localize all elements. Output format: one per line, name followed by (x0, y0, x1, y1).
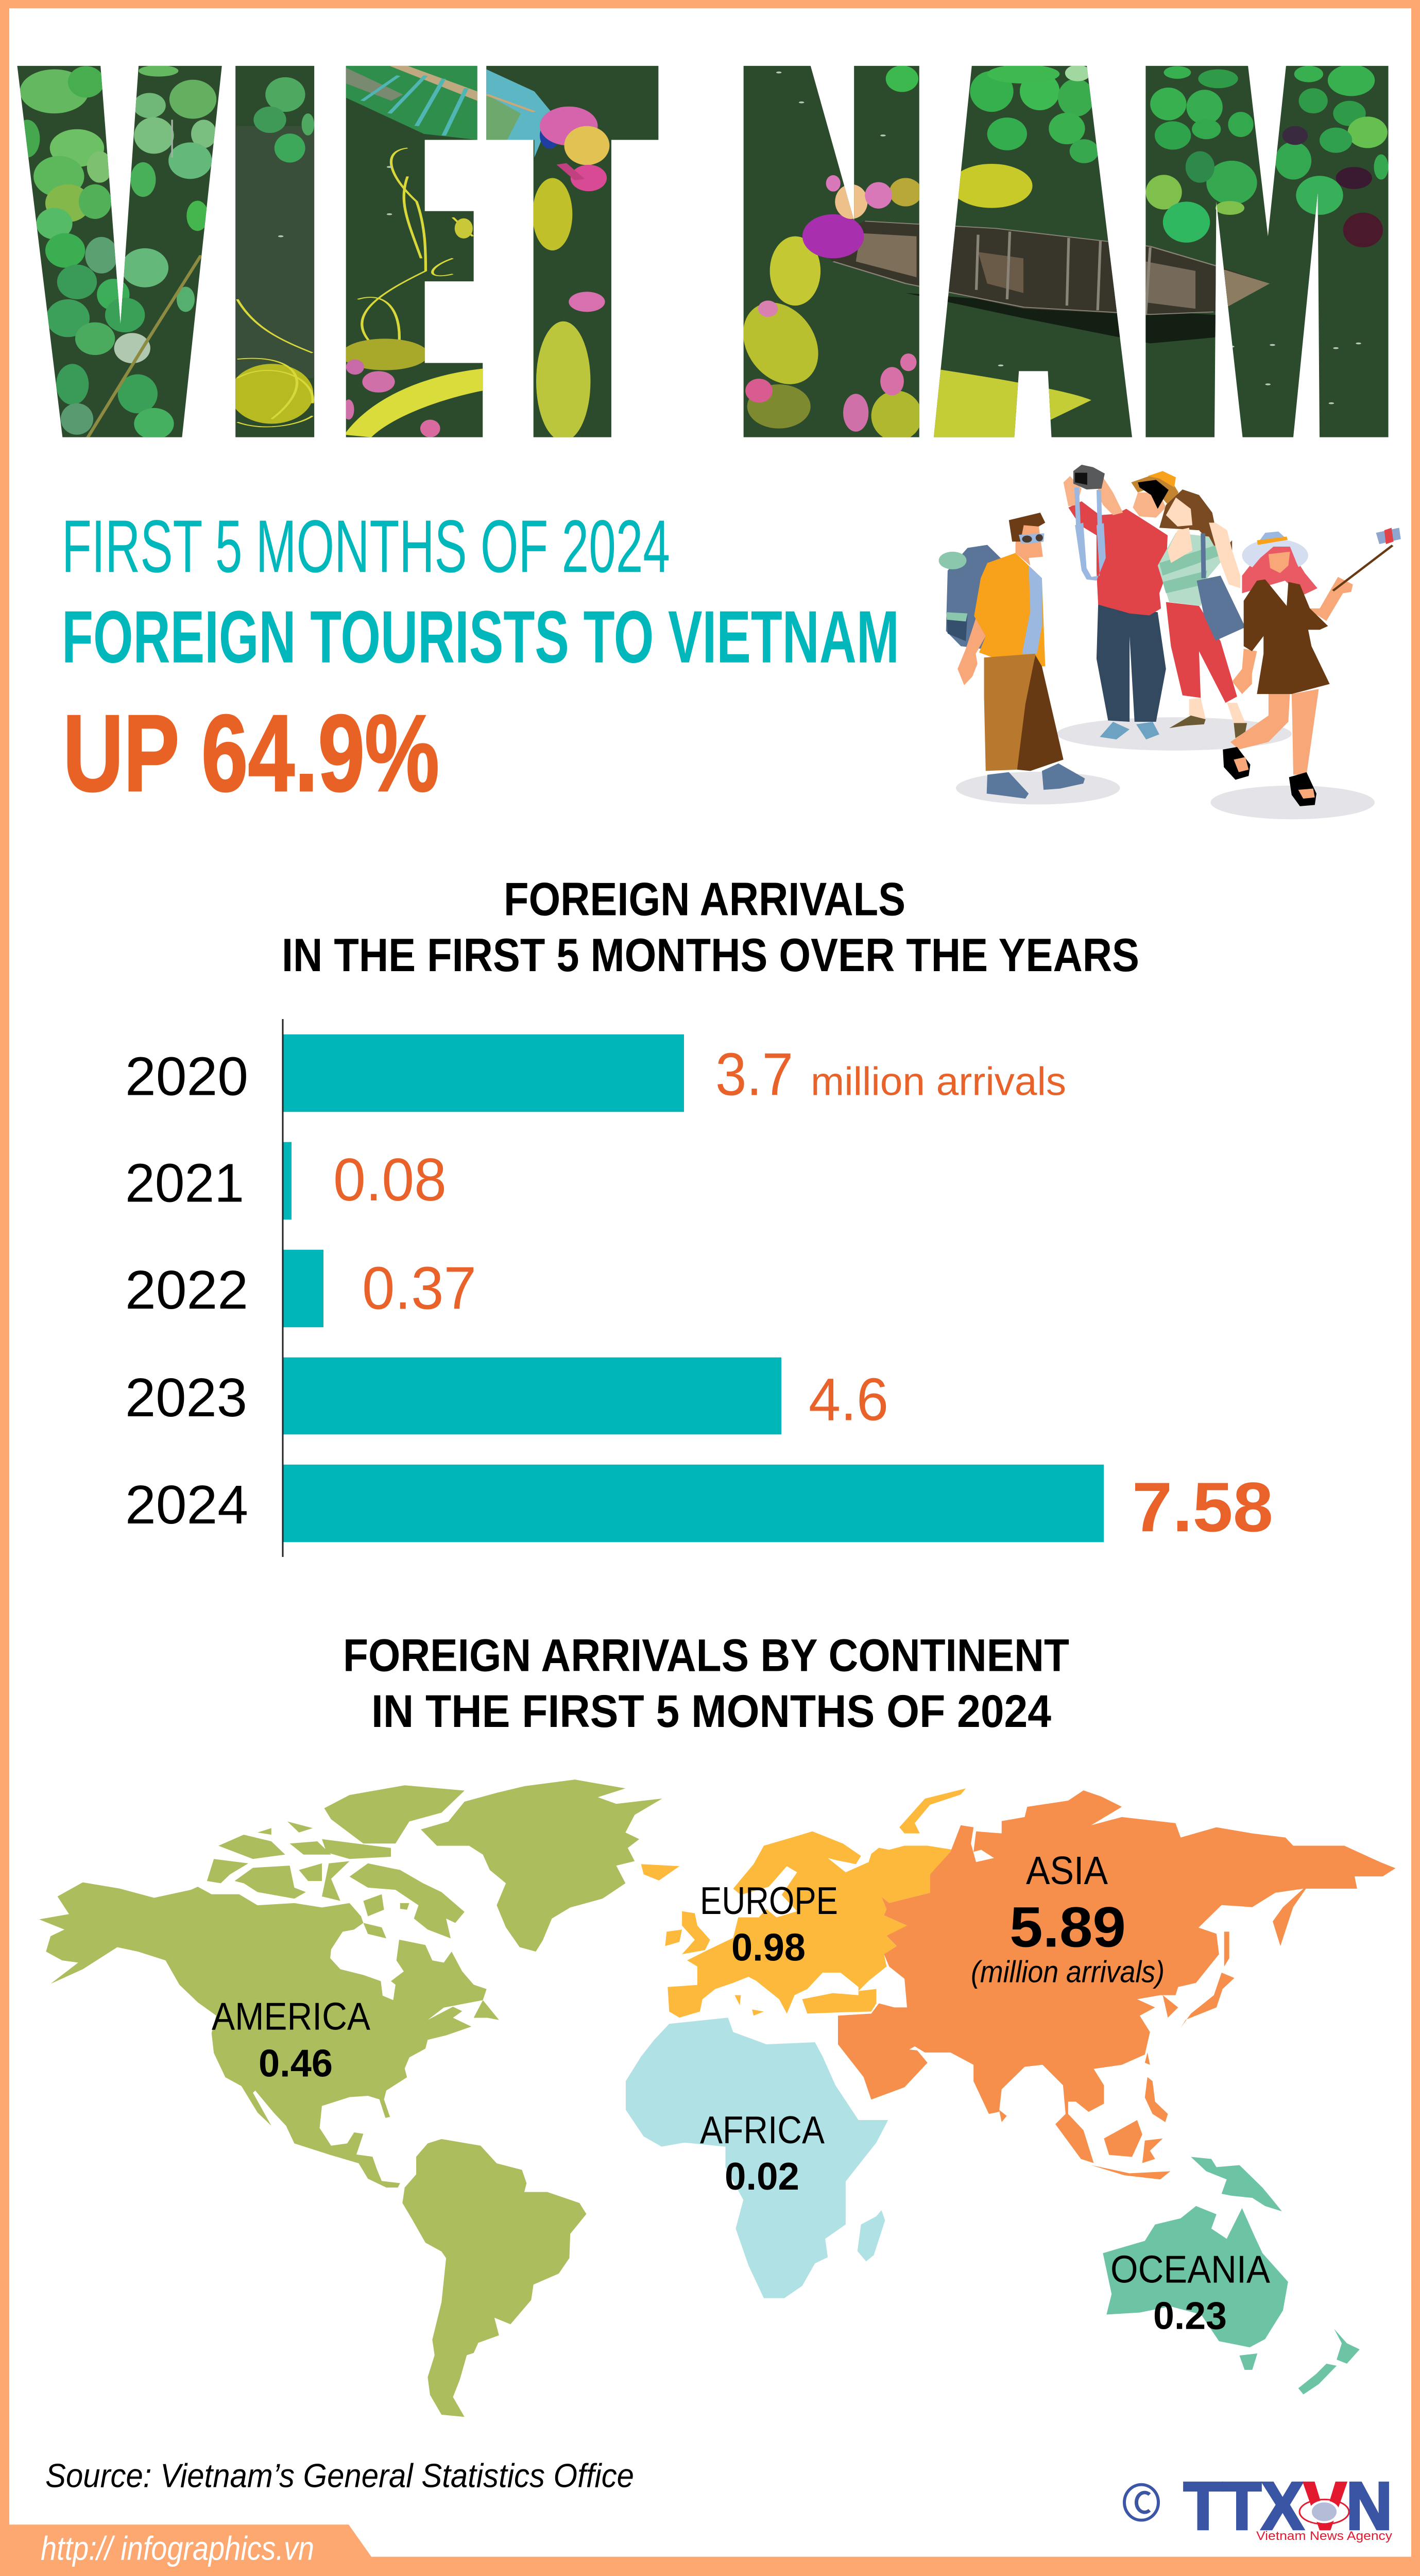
long boat (815, 221, 1270, 315)
top-left boat (346, 66, 477, 140)
tourist with tote bag (1158, 489, 1247, 738)
label: Europe (700, 1880, 838, 1969)
label: Europe: 0.98 (731, 1926, 806, 1969)
continent: America (39, 1780, 662, 2417)
continent: Oceania (1103, 2157, 1360, 2395)
woman on long boat (802, 214, 864, 258)
label: America: 0.46 (259, 2042, 333, 2085)
label: Asia: ASIA (1026, 1848, 1108, 1892)
continent: Asia (838, 1790, 1395, 2179)
year labels: 2021 (125, 1153, 244, 1213)
value labels (333, 1041, 1273, 1547)
bar chart: arrivals by year (125, 1019, 1273, 1557)
bars (283, 1035, 1104, 1542)
title: foreign tourists to Vietnam: FOREIGN TOURISTS TO VIETNAM (62, 596, 899, 679)
tourist with camera (1064, 465, 1178, 739)
label: Asia: 5.89 (1010, 1895, 1126, 1959)
label: Africa: AFRICA (700, 2109, 825, 2152)
heading: foreign arrivals over the years (282, 873, 1139, 981)
illustration: group of tourists (939, 465, 1401, 819)
label: Africa: 0.02 (725, 2156, 799, 2198)
pink flowers lower N (745, 379, 773, 403)
label: Asia (971, 1848, 1165, 1989)
reeds in N and A (770, 236, 820, 306)
value labels: 3.7 (715, 1041, 793, 1108)
teal boat bow (486, 70, 553, 158)
heading: foreign arrivals over the years: IN THE FIRST 5 MONTHS OVER THE YEARS (282, 929, 1139, 981)
value labels: million arrivals (811, 1059, 1066, 1104)
website link: http:// infographics.vn (41, 2530, 314, 2567)
year labels: 2022 (125, 1259, 248, 1320)
heading: foreign arrivals by continent (343, 1630, 1069, 1737)
reeds in T (533, 178, 572, 250)
heading: foreign arrivals by continent: IN THE FIRST 5 MONTHS OF 2024 (371, 1686, 1051, 1737)
label: America: AMERICA (212, 1995, 370, 2038)
scattered specks (278, 72, 1361, 404)
tourist with backpack (939, 513, 1085, 799)
shadow of boat (905, 293, 1218, 344)
logo: TTXVN: Vietnam News Agency (1256, 2529, 1393, 2543)
continent: Africa (626, 2018, 888, 2298)
label: Asia: (million arrivals) (971, 1955, 1165, 1989)
VIET NAM photo title (0, 63, 1420, 441)
label: America (212, 1995, 370, 2085)
label: Oceania: OCEANIA (1110, 2248, 1270, 2291)
logo: TTXVN: TTXVN (1184, 2468, 1392, 2544)
label: Oceania: 0.23 (1153, 2295, 1227, 2337)
woman in conical hat (540, 130, 557, 149)
label: Europe: EUROPE (700, 1880, 838, 1923)
heading: foreign arrivals over the years: FOREIGN ARRIVALS (504, 873, 905, 925)
label: Africa (700, 2109, 825, 2198)
year labels (125, 1046, 248, 1535)
tourist with selfie stick (1223, 528, 1401, 806)
value labels: 0.08 (333, 1146, 447, 1213)
stem (88, 255, 201, 437)
headline figure: up 64.9%: UP 64.9% (63, 692, 439, 814)
world map (39, 1780, 1395, 2417)
lily pads (14, 64, 1389, 439)
value labels: 0.37 (362, 1255, 476, 1322)
subtitle: first 5 months of 2024: FIRST 5 MONTHS OF 2024 (62, 505, 670, 588)
value labels: 4.6 (809, 1366, 888, 1433)
copyright symbol (1124, 2485, 1158, 2520)
continent: Europe (641, 1788, 966, 2018)
year labels: 2024 (125, 1474, 248, 1535)
year labels: 2020 (125, 1046, 248, 1107)
reeds and flowers lower left (230, 364, 313, 423)
label: Oceania (1110, 2248, 1270, 2337)
heading: foreign arrivals by continent: FOREIGN ARRIVALS BY CONTINENT (343, 1630, 1069, 1681)
value labels: 7.58 (1132, 1468, 1273, 1547)
year labels: 2023 (125, 1367, 247, 1428)
source note: Source: Vietnam’s General Statistics Office (45, 2458, 634, 2495)
